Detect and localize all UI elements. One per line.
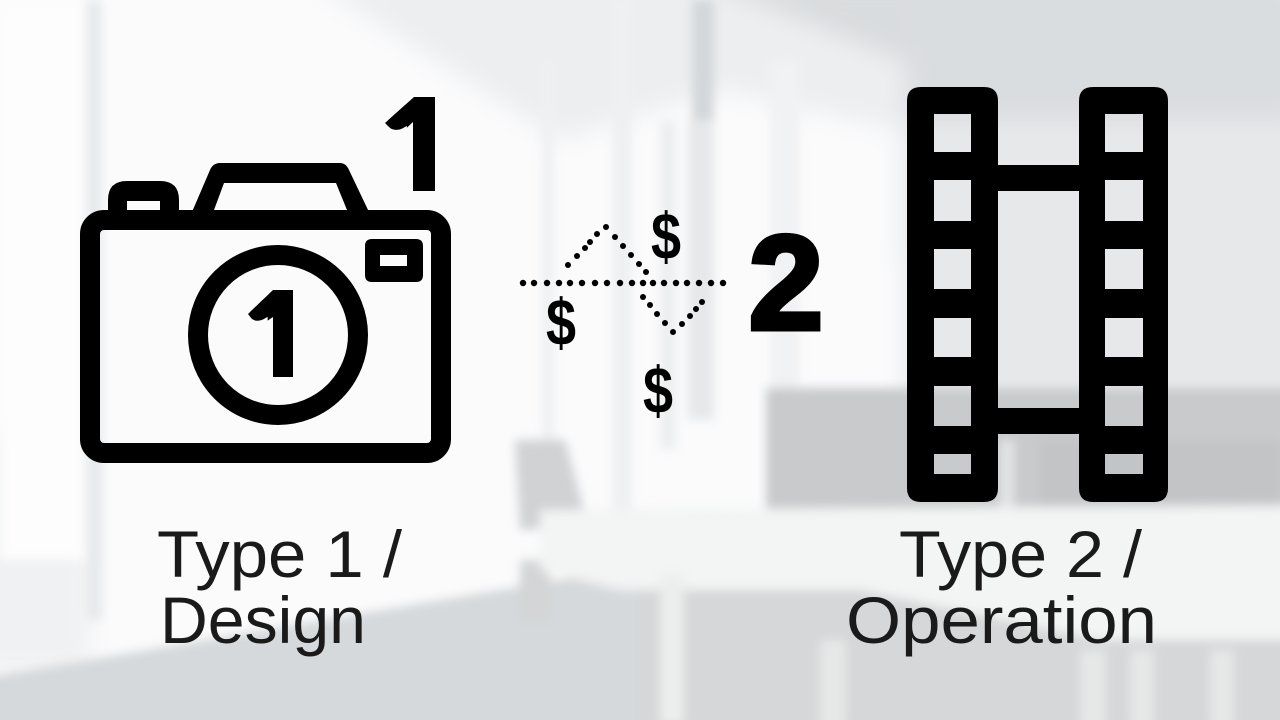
lens number: 1 xyxy=(226,283,331,397)
camera viewfinder hump xyxy=(192,163,369,212)
dotted wave chart xyxy=(520,224,726,335)
label: Type 2 / Operation: Type 2 / xyxy=(899,517,1143,591)
label: Type 1 / Design: Design xyxy=(160,583,366,657)
number 2: 2 xyxy=(749,209,823,358)
label: Type 2 / Operation: Operation xyxy=(846,583,1157,657)
camera small window xyxy=(365,239,423,282)
icon: film strip xyxy=(907,87,1168,502)
dotted wave peak xyxy=(565,224,649,275)
dollar sign upper: $ xyxy=(651,199,681,273)
label: Type 1 / Design: Type 1 / xyxy=(157,517,403,591)
dollar sign left: $ xyxy=(546,285,576,359)
camera lens xyxy=(198,255,358,415)
icon: camera xyxy=(90,163,441,453)
dotted axis xyxy=(520,280,726,286)
camera body xyxy=(90,220,441,453)
label: Type 2 / Operation xyxy=(846,517,1157,657)
number 1: 1 xyxy=(361,87,476,212)
dollar sign lower: $ xyxy=(643,353,673,427)
dotted wave trough xyxy=(640,294,705,335)
label: Type 1 / Design xyxy=(157,517,403,657)
camera flash button xyxy=(108,181,179,212)
